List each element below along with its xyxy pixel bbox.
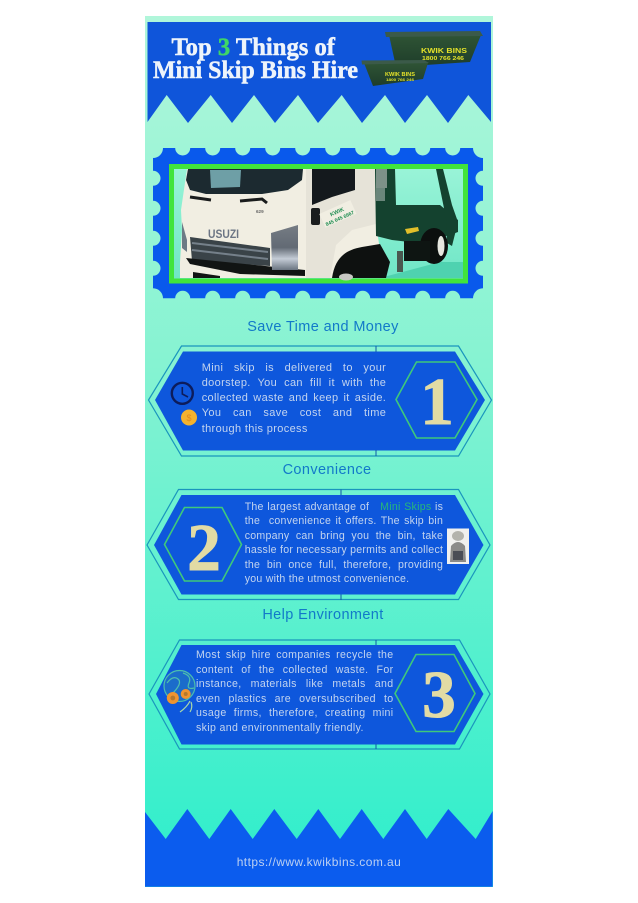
panel 1 hexagon <box>148 346 492 456</box>
heading: Convenience: Convenience <box>283 462 371 478</box>
number 3: 3 <box>422 658 456 732</box>
center ticks <box>340 490 342 600</box>
header banner <box>148 22 491 123</box>
icon: large skip bin <box>385 31 483 67</box>
door panel shading <box>306 169 376 278</box>
text block: panel 1: You can save cost and time <box>202 407 386 419</box>
heading: Help Environment: Help Environment <box>262 607 384 623</box>
title <box>153 34 358 84</box>
headlight <box>271 225 298 270</box>
number 1: 1 <box>420 365 454 439</box>
rear wheels <box>420 228 448 264</box>
icon: small skip bin: 1800 766 246 <box>386 77 415 82</box>
text block: panel 1: collected waste and keep it aside. <box>202 392 386 404</box>
side window <box>312 169 355 205</box>
outer outline <box>149 640 490 749</box>
mirror <box>311 208 320 225</box>
yellow part <box>405 227 419 234</box>
stamp frame with truck photo <box>153 148 483 298</box>
stabiliser leg <box>397 251 403 272</box>
icon: coin <box>181 410 197 426</box>
icon: large skip bin: 1800 766 246 <box>422 56 464 62</box>
wipers <box>190 197 267 203</box>
stamp scalloped border <box>153 148 483 298</box>
heading: Save Time and Money: Save Time and Money <box>247 319 399 335</box>
number 2: 2 <box>187 511 221 585</box>
panel 3 hexagon <box>149 640 490 749</box>
door sticker <box>319 200 357 229</box>
text block: panel 1 <box>202 362 386 435</box>
text block: panel 3: skip and environmentally friendly. <box>196 722 364 734</box>
text block: panel 3: content of the collected waste. For <box>196 664 394 676</box>
text block: panel 2: the convenience it offers. The skip bin <box>245 515 443 527</box>
outer outline <box>148 346 492 456</box>
truck cab body <box>180 169 384 278</box>
text block: panel 1: Mini skip is delivered to your <box>202 362 386 374</box>
door sticker: KWIK <box>329 207 345 218</box>
icon: large skip bin: KWIK BINS <box>421 46 467 55</box>
text block: panel 1: doorstep. You can fill it with the <box>202 377 386 389</box>
text block: panel 2: The largest advantage of Mini Skips is <box>245 501 443 513</box>
footer url: https://www.kwikbins.com.au <box>237 855 401 869</box>
outer outline <box>147 490 490 600</box>
number hexagon <box>396 362 477 438</box>
text block: panel 1: through this process <box>202 423 308 435</box>
wheel rim <box>339 274 353 280</box>
background panel <box>145 16 493 887</box>
text block: panel 3: instance, materials like metals and <box>196 678 394 690</box>
bumper shadow <box>186 258 305 276</box>
text block: panel 3 <box>196 649 394 734</box>
text block: panel 3: Most skip hire companies recycle the <box>196 649 394 661</box>
title: Mini Skip Bins Hire <box>153 57 358 84</box>
text block: panel 2: hassle for necessary permits and collect <box>245 544 443 556</box>
icon: coin: $ <box>186 413 192 423</box>
wheel arch <box>332 244 390 278</box>
center ticks <box>375 640 377 749</box>
icon: small skip bin: KWIK BINS <box>385 72 415 78</box>
text block: panel 2: you with the utmost convenience. <box>245 573 409 585</box>
model badge: 629 <box>256 209 264 214</box>
text block: panel 2: company can bring you the bin, take <box>245 530 443 542</box>
text block: panel 2 <box>244 501 443 585</box>
truck photo <box>180 169 463 280</box>
icon: clock <box>172 383 193 404</box>
center ticks <box>375 346 377 456</box>
grille <box>190 237 270 266</box>
green loader arm and chassis <box>375 169 458 243</box>
logo USUZI: USUZI <box>208 227 239 241</box>
blue fill <box>156 645 484 744</box>
text block: panel 3: even plastics are oversubscribed to <box>196 693 394 705</box>
footer banner <box>145 809 493 887</box>
text block: panel 3: usage firms, therefore, creating mini <box>196 707 394 719</box>
panel 2 hexagon <box>147 490 490 600</box>
text block: panel 2: the bin once full, therefore, providing <box>245 559 443 571</box>
title: Top 3 Things of <box>172 34 336 61</box>
rear cage <box>376 169 387 188</box>
blue fill <box>155 352 485 450</box>
icon: person photo <box>447 528 469 564</box>
number hexagon <box>164 508 242 581</box>
blue fill <box>154 495 484 594</box>
windscreen <box>186 169 303 194</box>
number hexagon <box>395 654 475 732</box>
header zigzag shape <box>148 22 491 123</box>
icon: globe with flowers <box>164 670 195 712</box>
door sticker: 845 645 6667 <box>325 210 356 228</box>
ground shadow <box>380 262 463 278</box>
photo frame <box>172 166 466 281</box>
icon: small skip bin <box>362 60 429 86</box>
